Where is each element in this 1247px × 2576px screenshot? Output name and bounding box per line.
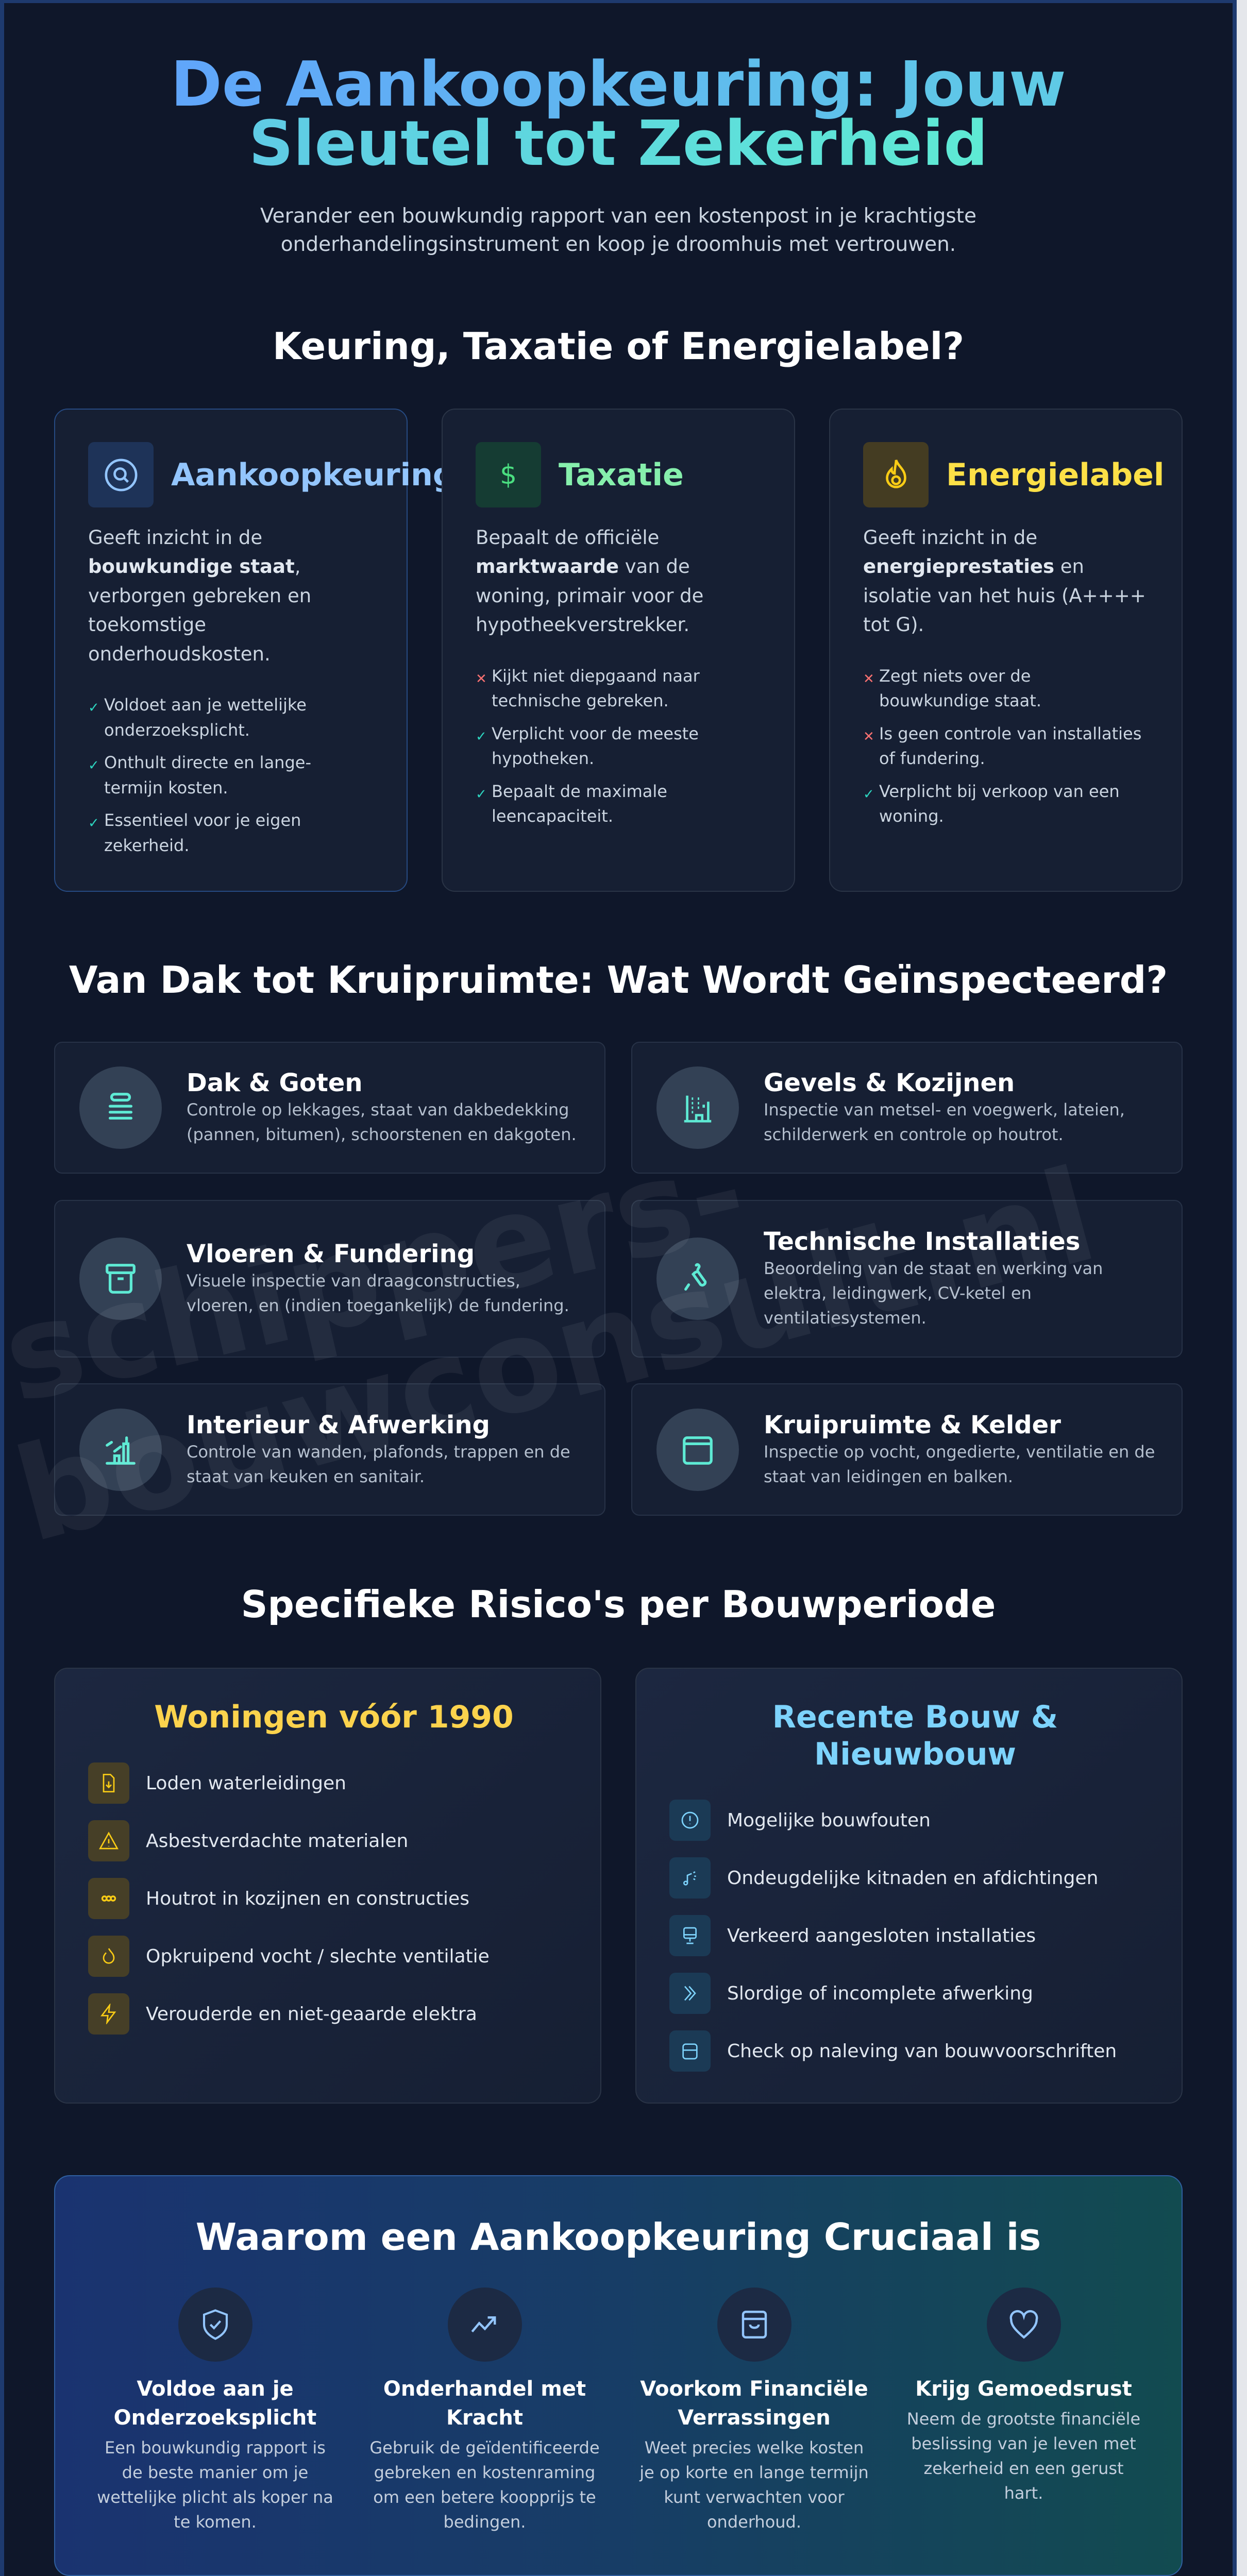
column: gemoedsrust: Neem de grootste financiële beslissing van je leven met zekerheid en een gerust [907, 2409, 1140, 2478]
icon: flame [863, 442, 929, 507]
panel: Taxatie: Bepaalt de officiële marktwaarde van de woning, primair voor de hypotheekverstrekker. [476, 527, 703, 636]
panel: Gevels & Kozijnen: Gevels & Kozijnen [764, 1069, 1015, 1097]
panel: Interieur & Afwerking [54, 1383, 605, 1516]
subtitle: Verander een bouwkundig rapport van een kostenpost in je krachtigste [260, 205, 976, 228]
panel: Taxatie: Verplicht voor de meeste hypotheken. [492, 724, 699, 768]
panel: summary: Waarom een Aankoopkeuring Cruciaal is [196, 2215, 1041, 2259]
panel: Recente Bouw: Verkeerd aangesloten installaties [727, 1925, 1036, 1946]
panel: Dak & Goten: Dak & Goten [187, 1069, 362, 1097]
heading: inspection: Van Dak tot Kruipruimte: Wat Wordt Geïnspecteerd? [69, 958, 1168, 1002]
column: gemoedsrust: Krijg Gemoedsrust [915, 2377, 1132, 2401]
panel: Vloeren & Fundering: vloeren, en (indien toegankelijk) de fundering. [187, 1296, 569, 1315]
icon: chart [79, 1409, 162, 1491]
panel: Recente Bouw: Slordige of incomplete afwerking [727, 1982, 1033, 2004]
panel: Taxatie: Bepaalt de maximale leencapaciteit. [492, 782, 667, 826]
panel: Gevels & Kozijnen: Inspectie van metsel- en voegwerk, lateien, schilderwerk en controle op houtrot. [764, 1100, 1125, 1144]
column: onderzoeksplicht: Voldoe aan je [137, 2377, 294, 2401]
panel: Aankoopkeuring [54, 409, 408, 892]
panel: Dak & Goten: Controle op lekkages, staat van dakbedekking (pannen, bitumen), schoorstenen en dakgoten. [187, 1100, 577, 1144]
column: financiele verrassingen [639, 2287, 869, 2532]
panel: Aankoopkeuring: Voldoet aan je wettelijke onderzoeksplicht. [104, 695, 307, 740]
icon: dollar [476, 442, 541, 507]
panel: Kruipruimte & Kelder [631, 1383, 1183, 1516]
panel: Energielabel [829, 409, 1183, 892]
panel: Taxatie: ✕ [476, 671, 487, 687]
panel: Aankoopkeuring: Aankoopkeuring [171, 456, 455, 493]
panel: Technische Installaties: Beoordeling van de staat en werking van [764, 1259, 1103, 1278]
panel: Aankoopkeuring: ✓ [88, 758, 99, 773]
panel: Technische Installaties: Technische Installaties [764, 1227, 1080, 1256]
column: onderzoeksplicht: Een bouwkundig rapport is de beste manier om je wettelijke plicht als koper na te komen. [97, 2438, 333, 2532]
panel: Woningen voor 1990: Opkruipend vocht / slechte ventilatie [146, 1945, 490, 1967]
watermark: schippers- [4, 1116, 759, 1432]
column: onderzoeksplicht [97, 2287, 333, 2532]
column: gemoedsrust: hart. [1004, 2483, 1043, 2503]
column: gemoedsrust [907, 2287, 1140, 2503]
column: onderzoeksplicht: Onderzoeksplicht [114, 2406, 316, 2430]
title [171, 49, 1066, 180]
icon: frame [656, 1409, 739, 1491]
panel: Recente Bouw: Recente Bouw & [772, 1699, 1058, 1735]
panel: Vloeren & Fundering [54, 1200, 605, 1358]
panel: Taxatie: ✓ [476, 729, 487, 744]
panel: Taxatie [442, 409, 795, 892]
panel: Kruipruimte & Kelder: Kruipruimte & Kelder [764, 1411, 1061, 1439]
panel: Recente Bouw: Mogelijke bouwfouten [727, 1809, 931, 1831]
panel: Energielabel: Is geen controle van installaties of fundering. [879, 724, 1141, 768]
column: onderhandel: Kracht [446, 2406, 523, 2430]
icon: roof layers [79, 1066, 162, 1149]
panel: Taxatie: ✓ [476, 787, 487, 802]
panel: Recente Bouw: Nieuwbouw [814, 1736, 1016, 1772]
subtitle: onderhandelingsinstrument en koop je droomhuis met vertrouwen. [281, 233, 956, 256]
panel: Technische Installaties [631, 1200, 1183, 1358]
panel: Energielabel: Verplicht bij verkoop van een woning. [879, 782, 1120, 826]
panel: Aankoopkeuring: Geeft inzicht in de bouwkundige staat, verborgen gebreken en toekomstige onderhoudskosten. [88, 527, 311, 665]
panel: Energielabel: ✕ [863, 671, 874, 687]
panel: Recente Bouw [635, 1668, 1183, 2104]
panel: summary [54, 2175, 1183, 2576]
panel: Interieur & Afwerking: staat van keuken en sanitair. [187, 1466, 425, 1486]
panel: Aankoopkeuring: ✓ [88, 816, 99, 831]
panel: Interieur & Afwerking: Interieur & Afwerking [187, 1411, 490, 1439]
panel: Kruipruimte & Kelder: Inspectie op vocht, ongedierte, ventilatie en de [764, 1442, 1155, 1461]
panel: Woningen voor 1990: Houtrot in kozijnen en constructies [146, 1888, 469, 1909]
panel: Gevels & Kozijnen [631, 1042, 1183, 1174]
icon: tool [656, 1238, 739, 1320]
column: financiele verrassingen: Weet precies welke kosten je op korte en lange termijn kunt verwachten voor onderhoud. [639, 2438, 869, 2532]
panel: Taxatie: Kijkt niet diepgaand naar technische gebreken. [492, 666, 700, 710]
panel: Woningen voor 1990: Woningen vóór 1990 [154, 1699, 514, 1735]
panel: Kruipruimte & Kelder: staat van leidingen en balken. [764, 1466, 1013, 1486]
panel: Vloeren & Fundering: Visuele inspectie van draagconstructies, [187, 1271, 520, 1291]
icon: dollar: $ [500, 460, 517, 490]
panel: Recente Bouw: Check op naleving van bouwvoorschriften [727, 2040, 1117, 2062]
panel: Aankoopkeuring: Essentieel voor je eigen zekerheid. [104, 810, 301, 855]
column: onderhandel: Gebruik de geïdentificeerde gebreken en kostenraming om een betere koopprijs te bedingen. [369, 2438, 600, 2532]
title: De Aankoopkeuring: Jouw [171, 49, 1066, 121]
panel: Woningen voor 1990: Verouderde en niet-geaarde elektra [146, 2003, 477, 2025]
icon: box [79, 1238, 162, 1320]
panel: Dak & Goten [54, 1042, 605, 1174]
panel: Vloeren & Fundering: Vloeren & Fundering [187, 1240, 475, 1268]
panel: Woningen voor 1990: Loden waterleidingen [146, 1772, 346, 1794]
watermark: bouwconsult.nl [4, 1140, 1109, 1571]
panel: Technische Installaties: elektra, leidingwerk, CV-ketel en [764, 1283, 1032, 1303]
panel: Woningen voor 1990: Asbestverdachte materialen [146, 1830, 408, 1852]
panel: Taxatie: Taxatie [559, 456, 684, 493]
panel: Woningen voor 1990 [54, 1668, 601, 2104]
panel: Aankoopkeuring: ✓ [88, 700, 99, 716]
panel: Technische Installaties: ventilatiesystemen. [764, 1308, 926, 1328]
icon: building [656, 1066, 739, 1149]
subtitle [260, 205, 976, 256]
panel: Energielabel: ✕ [863, 729, 874, 744]
title: Sleutel tot Zekerheid [249, 108, 988, 180]
panel: Energielabel: ✓ [863, 787, 874, 802]
icon: search [88, 442, 154, 507]
panel: Interieur & Afwerking: Controle van wanden, plafonds, trappen en de [187, 1442, 570, 1461]
column: onderhandel [369, 2287, 600, 2532]
column: onderhandel: Onderhandel met [383, 2377, 586, 2401]
column: financiele verrassingen: Verrassingen [678, 2406, 831, 2430]
panel: Energielabel: Zegt niets over de bouwkundige staat. [879, 666, 1041, 710]
heading: comparison: Keuring, Taxatie of Energielabel? [273, 325, 964, 368]
column: financiele verrassingen: Voorkom Financiële [640, 2377, 868, 2401]
panel: Energielabel: Energielabel [946, 456, 1164, 493]
heading: risks: Specifieke Risico's per Bouwperiode [241, 1583, 996, 1626]
panel: Energielabel: Geeft inzicht in de energieprestaties en isolatie van het huis (A++++ tot G). [863, 527, 1146, 636]
panel: Recente Bouw: Ondeugdelijke kitnaden en afdichtingen [727, 1867, 1098, 1889]
panel: Aankoopkeuring: Onthult directe en lange-termijn kosten. [104, 753, 311, 798]
